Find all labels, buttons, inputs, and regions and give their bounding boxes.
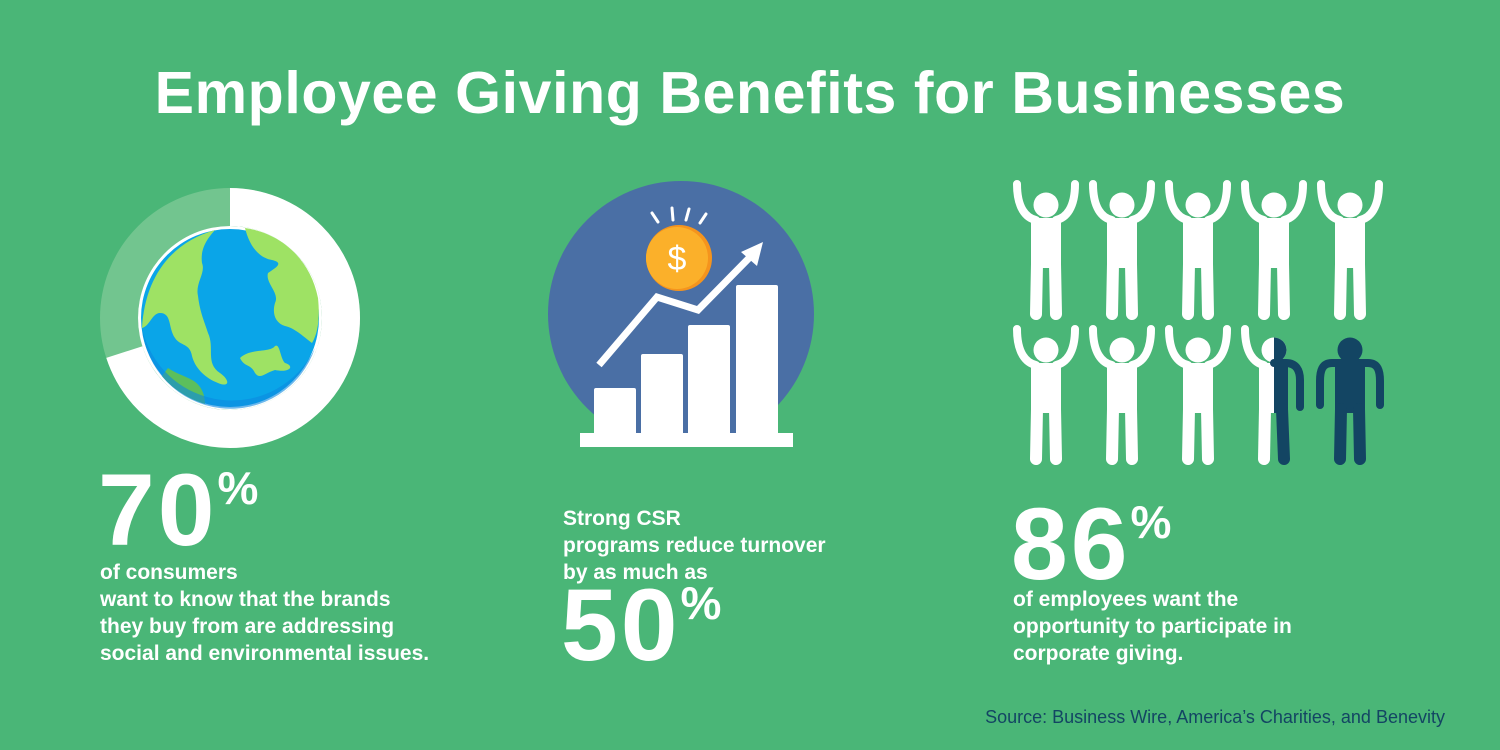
text: employees: of employees want the — [1013, 588, 1238, 611]
text: employees: opportunity to participate in — [1013, 615, 1292, 638]
text: consumers: they buy from are addressing — [100, 615, 394, 638]
text: consumers: social and environmental issues. — [100, 642, 429, 665]
text: CSR programs: Strong CSR — [563, 507, 681, 530]
icon: growth chart with coin — [548, 181, 814, 447]
source: Source: Business Wire, America’s Charities, and Benevity — [985, 707, 1445, 727]
text: employees: corporate giving. — [1013, 642, 1183, 665]
text: CSR programs: by as much as — [563, 561, 708, 584]
text: employees — [1013, 588, 1292, 665]
icon: globe with donut ring — [100, 188, 360, 448]
icon: people pictogram — [1013, 180, 1384, 465]
stat: 70%: 70% — [98, 453, 258, 567]
icon: growth chart with coin: $ — [668, 240, 687, 278]
text: consumers — [100, 561, 429, 665]
stat: 86%: 86% — [1011, 487, 1171, 601]
text: consumers: of consumers — [100, 561, 238, 584]
text: CSR programs — [563, 507, 826, 584]
text: CSR programs: programs reduce turnover — [563, 534, 826, 557]
text: consumers: want to know that the brands — [100, 588, 391, 611]
title: Employee Giving Benefits for Businesses — [155, 60, 1345, 126]
stat: 50%: 50% — [561, 568, 721, 682]
